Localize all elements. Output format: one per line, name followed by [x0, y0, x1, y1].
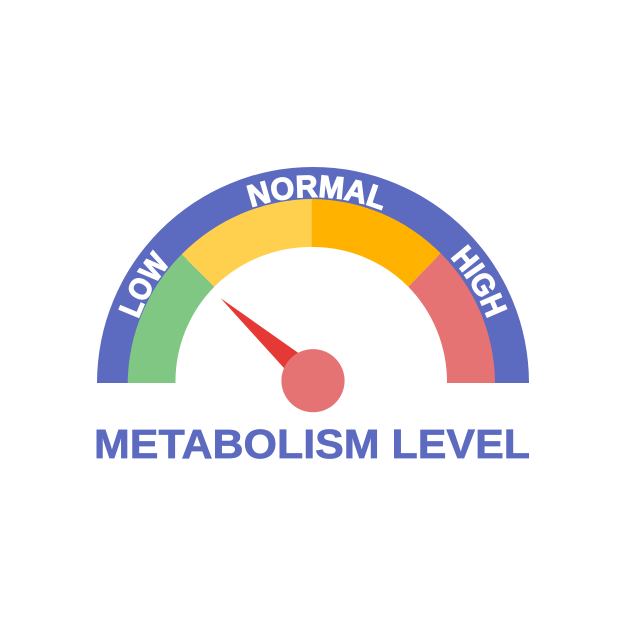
gauge segment: high (red): [408, 253, 495, 383]
gauge needle: [221, 298, 308, 378]
label: LOW: LOW: [118, 250, 168, 318]
gauge outer blue band: [97, 167, 529, 383]
label: NORMAL: NORMAL: [246, 174, 384, 210]
label: HIGH: HIGH: [450, 244, 508, 318]
gauge segment: normal lower (yellow): [182, 199, 312, 287]
gauge segment: low (green): [128, 254, 214, 383]
title: METABOLISM LEVEL: [94, 421, 530, 467]
gauge segment: normal upper (orange): [312, 199, 441, 287]
needle hub: [281, 349, 345, 412]
